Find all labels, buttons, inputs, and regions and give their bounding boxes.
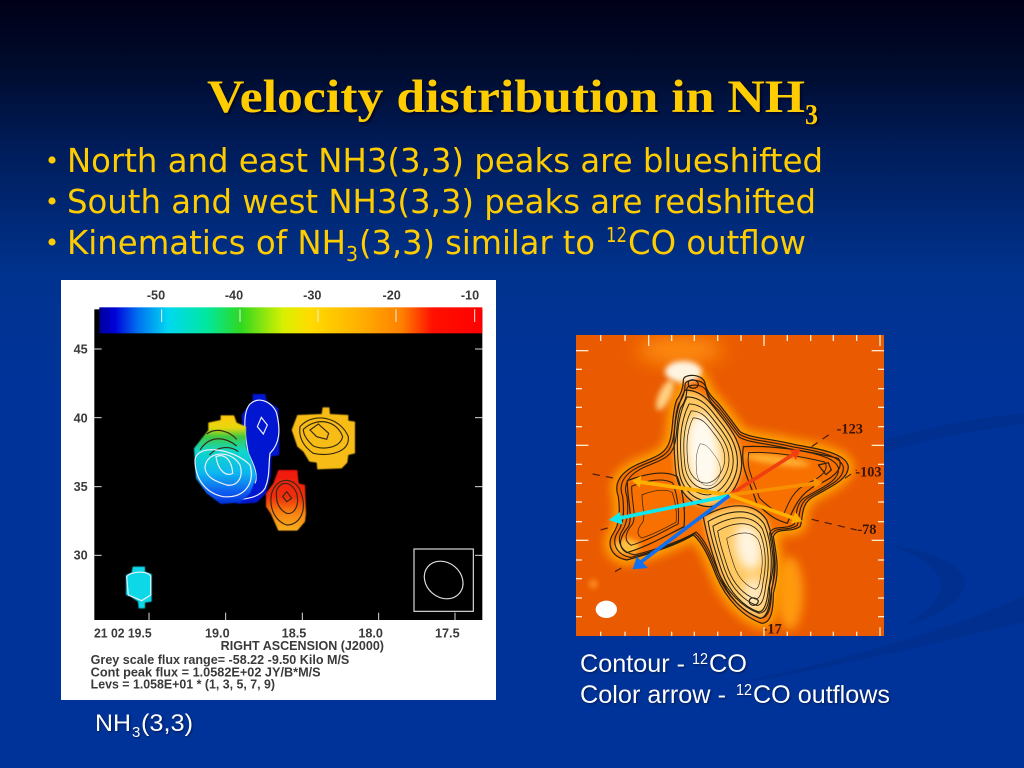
colour scale labels: -10 [461, 288, 479, 302]
declination axis labels: 35 [74, 480, 88, 494]
position-angle labels: -103 [855, 465, 882, 481]
axis ticks [94, 349, 482, 620]
beam ellipse [596, 601, 617, 618]
caption: contour and arrow legend [580, 650, 890, 709]
caption: contour and arrow legend: CO [709, 650, 747, 678]
diffuse glow [589, 337, 848, 630]
right ascension axis labels: 18.0 [358, 626, 383, 640]
colour scale labels: -30 [303, 288, 321, 302]
axis title: RIGHT ASCENSION (J2000) [221, 639, 384, 653]
caption: contour and arrow legend: CO outflows [753, 681, 890, 709]
colour scale labels: -40 [225, 288, 243, 302]
right ascension axis labels: 17.5 [435, 626, 460, 640]
title: Velocity distribution in NH [207, 71, 805, 123]
declination axis labels: 40 [74, 411, 88, 425]
right ascension axis labels: 19.0 [205, 626, 230, 640]
emission blob: north peak (blue) [237, 394, 279, 504]
beam inset box [414, 549, 473, 611]
position-angle labels: -123 [837, 421, 863, 437]
bullet 3: Kinematics of NH [67, 223, 346, 262]
dashed position-angle lines [593, 432, 857, 572]
bullet 3: CO outflow [628, 223, 806, 262]
arrow: orange outflow (W) [729, 477, 822, 495]
map parameters [91, 653, 349, 691]
emission blob: east peak (rainbow gradient) [194, 415, 257, 504]
arrow: cyan outflow (E) [609, 496, 729, 525]
caption: NH3(3,3): (3,3) [141, 710, 193, 737]
background swooshes [700, 414, 1024, 690]
right ascension axis labels: 18.5 [282, 626, 306, 640]
caption: contour and arrow legend: Color arrow - [580, 681, 726, 709]
caption: contour and arrow legend: 12 [736, 682, 752, 699]
plot area [94, 309, 482, 620]
position-angle labels: -78 [857, 522, 876, 538]
colour scale labels [147, 288, 479, 302]
arrow: yellow outflow (SW) [729, 495, 802, 523]
contours [610, 375, 848, 623]
bullet 3: (3,3) similar to [359, 223, 595, 262]
position-angle labels: -17 [763, 621, 782, 637]
bullet 1: North and east NH3(3,3) peaks are blueshifted [67, 141, 823, 180]
map parameters: Grey scale flux range= -58.22 -9.50 Kilo M/S [91, 653, 349, 667]
arrow: blue outflow (SE) [633, 496, 729, 569]
map parameters: Cont peak flux = 1.0582E+02 JY/B*M/S [91, 665, 321, 679]
declination axis labels: 30 [74, 548, 88, 562]
right ascension axis labels [94, 626, 460, 640]
bullet 3: 3 [346, 242, 358, 266]
emission blob: south peak (red-orange) [266, 470, 306, 531]
frame ticks [576, 335, 884, 636]
panel: NH3 velocity map [61, 280, 496, 700]
colour scale labels: -20 [383, 288, 401, 302]
arrow: red outflow (NW) [729, 449, 801, 495]
emission blob: small cyan source [126, 567, 152, 608]
emission blob: west peak (yellow) [292, 407, 355, 469]
bullet 2: South and west NH3(3,3) peaks are redshifted [67, 182, 816, 221]
colour scale labels: -50 [147, 288, 165, 302]
panel: 12CO contour map [576, 335, 884, 637]
caption: contour and arrow legend: Contour - [580, 650, 685, 678]
map parameters: Levs = 1.058E+01 * (1, 3, 5, 7, 9) [91, 677, 275, 691]
caption: NH3(3,3): 3 [132, 724, 140, 741]
caption: NH3(3,3): NH [95, 710, 131, 737]
title: 3 [805, 99, 818, 131]
bullet 3 [48, 223, 806, 266]
position-angle labels [763, 421, 882, 637]
declination axis labels: 45 [74, 342, 88, 356]
caption: contour and arrow legend: 12 [692, 651, 708, 668]
right ascension axis labels: 21 02 19.5 [94, 626, 152, 640]
bullet 3: 12 [606, 223, 627, 247]
bullet list [48, 141, 823, 266]
caption: NH3(3,3) [95, 710, 193, 741]
colour scale bar [99, 307, 482, 333]
declination axis labels [74, 342, 88, 562]
arrow: yellow outflow (NE) [632, 476, 729, 495]
